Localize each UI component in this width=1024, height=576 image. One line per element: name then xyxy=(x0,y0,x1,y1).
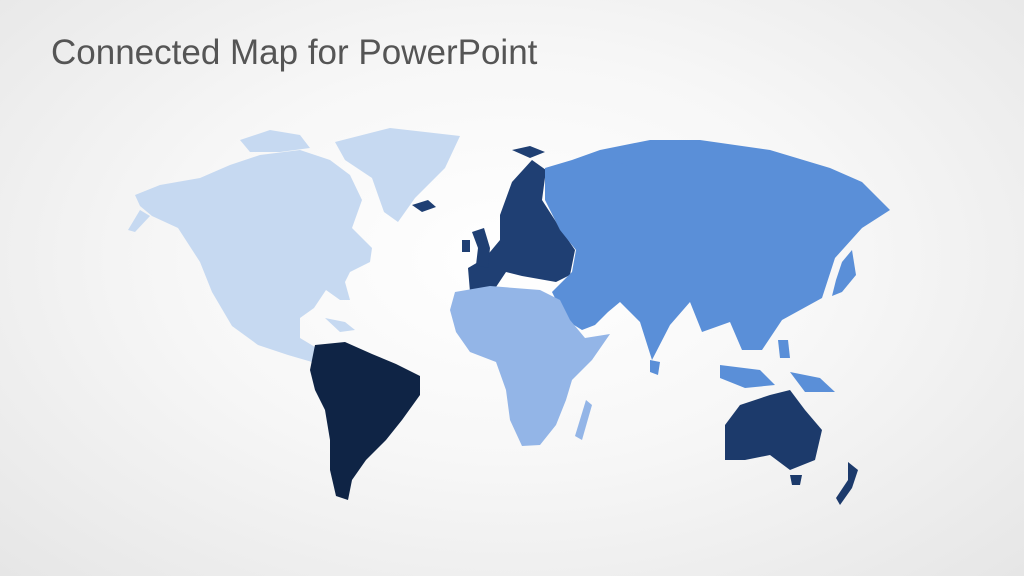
region: australia xyxy=(725,390,858,505)
region: south america xyxy=(310,342,420,500)
region: north america xyxy=(128,128,460,362)
region: africa xyxy=(450,286,610,446)
icon: iceland xyxy=(412,200,436,212)
region: europe xyxy=(462,146,575,292)
title: Connected Map for PowerPoint xyxy=(51,33,537,72)
region: asia xyxy=(545,140,890,392)
